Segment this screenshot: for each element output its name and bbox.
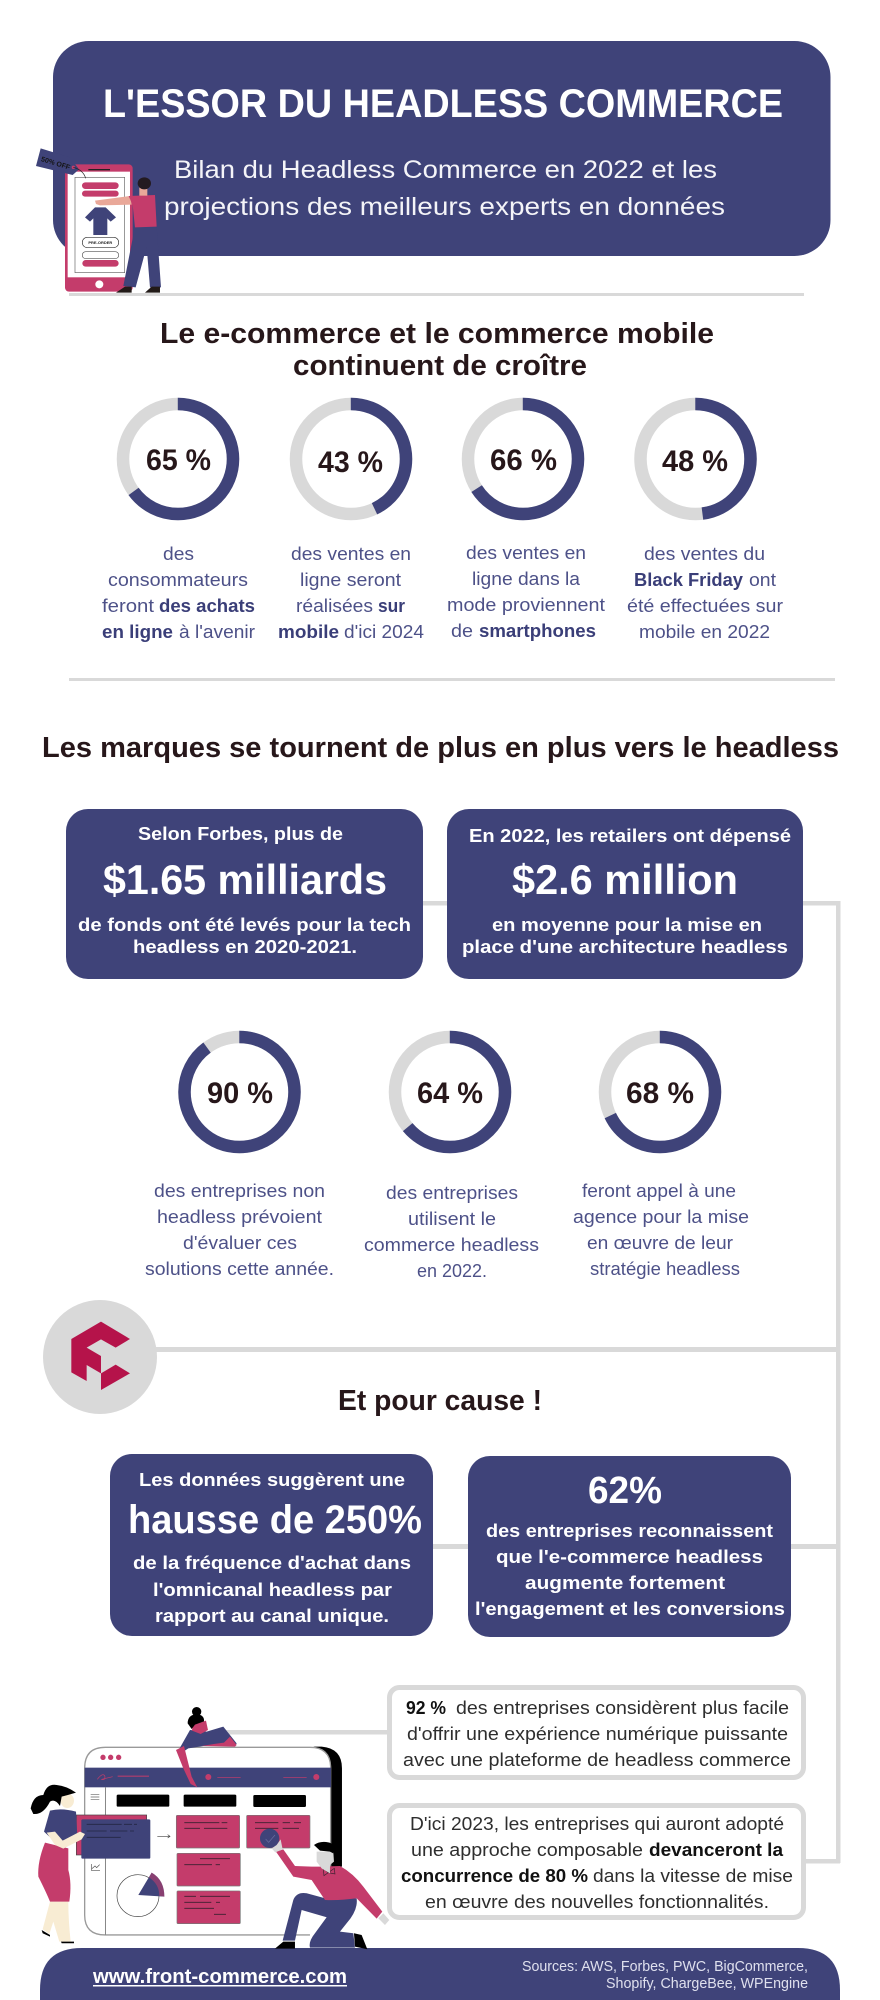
callout: d'ici 2023: devanceront la	[649, 1840, 784, 1860]
subtitle: projections des meilleurs experts en données	[164, 193, 725, 221]
caption: ont	[749, 570, 776, 590]
caption	[278, 544, 424, 642]
caption: des entreprises non	[154, 1181, 325, 1201]
title: L'ESSOR DU HEADLESS COMMERCE	[103, 82, 783, 126]
icon: phone shopper illustration: PRE-ORDER	[88, 240, 112, 245]
stat 90 %: 90 %	[207, 1077, 273, 1110]
caption: des ventes du	[644, 544, 765, 564]
stat 43 %	[278, 404, 424, 642]
caption: des achats	[159, 596, 255, 616]
callout: 92 %: des entreprises considèrent plus facile	[456, 1698, 789, 1718]
man right	[272, 1839, 389, 1949]
stat 66 %	[447, 404, 605, 641]
caption: headless prévoient	[157, 1207, 322, 1227]
card: 2.6 million: $2.6 million	[512, 856, 738, 903]
woman top	[176, 1707, 237, 1787]
callout: d'ici 2023: dans la vitesse de mise	[593, 1866, 793, 1886]
callout: d'ici 2023	[390, 1806, 804, 1918]
caption	[447, 543, 605, 641]
caption: des entreprises	[386, 1183, 518, 1203]
caption: stratégie headless	[590, 1259, 740, 1279]
callout: 92 %	[390, 1688, 804, 1778]
connector lines	[156, 901, 840, 1864]
caption: en œuvre de leur	[587, 1233, 733, 1253]
caption: des ventes en	[466, 543, 586, 563]
card: hausse de 250%	[110, 1454, 433, 1636]
card: 1.65 milliards: headless en 2020-2021.	[133, 936, 357, 957]
stat 68 %	[573, 1037, 749, 1279]
card: 62%: l'engagement et les conversions	[475, 1598, 785, 1619]
stat 65 %	[102, 404, 255, 642]
caption: mode proviennent	[447, 595, 605, 615]
callout: d'ici 2023: une approche composable	[411, 1840, 643, 1860]
stat 48 %	[627, 404, 783, 642]
heading: marques: Les marques se tournent de plus en plus vers le headless	[42, 732, 839, 764]
caption	[102, 544, 255, 642]
heading: e-commerce: continuent de croître	[293, 350, 587, 382]
floating card	[76, 1815, 150, 1859]
subtitle: Bilan du Headless Commerce en 2022 et les	[174, 156, 717, 184]
caption	[145, 1181, 334, 1279]
caption: ligne dans la	[472, 569, 581, 589]
caption: sur	[378, 596, 405, 616]
caption: ligne seront	[300, 570, 401, 590]
caption: d'évaluer ces	[183, 1233, 297, 1253]
illustration: team building a dashboard	[31, 1707, 389, 1949]
caption: à l'avenir	[179, 622, 255, 642]
stat 48 %: 48 %	[662, 445, 728, 478]
woman left	[31, 1785, 85, 1943]
card: 2.6 million: en moyenne pour la mise en	[492, 914, 762, 935]
icon: front-commerce logo	[43, 1300, 157, 1414]
caption: en 2022.	[417, 1261, 487, 1281]
callout: 92 %: 92 %	[406, 1698, 446, 1718]
caption: mobile	[278, 622, 339, 642]
stat 90 %	[145, 1037, 334, 1279]
caption	[627, 544, 783, 642]
card: 62%: augmente fortement	[525, 1572, 725, 1593]
sources: Shopify, ChargeBee, WPEngine	[606, 1975, 808, 1992]
card: 62%: 62%	[588, 1470, 662, 1512]
card: 2.6 million	[447, 809, 803, 979]
sources	[522, 1958, 808, 1992]
connector rule under header	[69, 293, 804, 296]
caption: des	[163, 544, 194, 564]
icon: phone shopper illustration	[36, 148, 161, 293]
stat 43 %: 43 %	[318, 446, 383, 479]
caption: consommateurs	[108, 570, 248, 590]
caption	[573, 1181, 749, 1279]
caption: feront appel à une	[582, 1181, 736, 1201]
caption: solutions cette année.	[145, 1259, 334, 1279]
stat 64 %: 64 %	[417, 1077, 483, 1110]
callout: 92 %: d'offrir une expérience numérique puissante	[407, 1724, 788, 1744]
heading: e-commerce	[160, 318, 714, 382]
callout: d'ici 2023: D'ici 2023, les entreprises qui auront adopté	[410, 1814, 784, 1834]
card: 1.65 milliards: $1.65 milliards	[103, 856, 387, 903]
card: 62%: des entreprises reconnaissent	[486, 1520, 773, 1541]
card: 1.65 milliards	[66, 809, 423, 979]
sources: Sources: AWS, Forbes, PWC, BigCommerce,	[522, 1958, 808, 1975]
card: hausse de 250%: rapport au canal unique.	[155, 1605, 389, 1626]
card: 62%	[468, 1456, 791, 1637]
stat 66 %: 66 %	[490, 444, 557, 477]
pie chart	[117, 1873, 164, 1917]
caption: Black Friday	[634, 570, 743, 590]
card: 2.6 million: place d'une architecture headless	[462, 936, 788, 957]
footer band	[40, 1948, 840, 2000]
kanban cards	[176, 1815, 310, 1924]
card: 1.65 milliards: de fonds ont été levés pour la tech	[78, 914, 411, 935]
stat 68 %: 68 %	[626, 1077, 694, 1110]
website link: www.front-commerce.com	[92, 1966, 347, 1988]
caption: en ligne	[102, 622, 173, 642]
card: 2.6 million: En 2022, les retailers ont dépensé	[469, 825, 791, 846]
heading: et pour cause: Et pour cause !	[338, 1385, 542, 1417]
stat 65 %: 65 %	[146, 444, 211, 477]
caption: feront	[102, 596, 154, 616]
caption: des ventes en	[291, 544, 411, 564]
caption: de	[451, 621, 473, 641]
caption	[364, 1183, 539, 1281]
card: hausse de 250%: Les données suggèrent une	[139, 1469, 405, 1490]
callout: d'ici 2023: en œuvre des nouvelles fonctionnalités.	[425, 1892, 769, 1912]
caption: agence pour la mise	[573, 1207, 749, 1227]
caption: mobile en 2022	[639, 622, 770, 642]
header panel	[53, 41, 830, 256]
callout: 92 %: avec une plateforme de headless commerce	[403, 1750, 791, 1770]
heading: e-commerce: Le e-commerce et le commerce mobile	[160, 318, 714, 350]
subtitle	[164, 156, 725, 221]
caption: commerce headless	[364, 1235, 539, 1255]
card: hausse de 250%: de la fréquence d'achat dans	[133, 1552, 411, 1573]
card: hausse de 250%: hausse de 250%	[128, 1498, 422, 1542]
card: hausse de 250%: l'omnicanal headless par	[153, 1579, 392, 1600]
caption: réalisées	[296, 596, 373, 616]
browser window	[85, 1747, 342, 1935]
stat 64 %	[364, 1037, 539, 1281]
card: 1.65 milliards: Selon Forbes, plus de	[138, 823, 343, 844]
caption: été effectuées sur	[627, 596, 783, 616]
card: 62%: que l'e-commerce headless	[496, 1546, 763, 1567]
caption: d'ici 2024	[344, 622, 424, 642]
caption: smartphones	[479, 621, 596, 641]
callout: d'ici 2023: concurrence de 80 %	[401, 1866, 588, 1886]
caption: utilisent le	[408, 1209, 496, 1229]
icon: phone shopper illustration: 50% OFF	[40, 156, 71, 172]
